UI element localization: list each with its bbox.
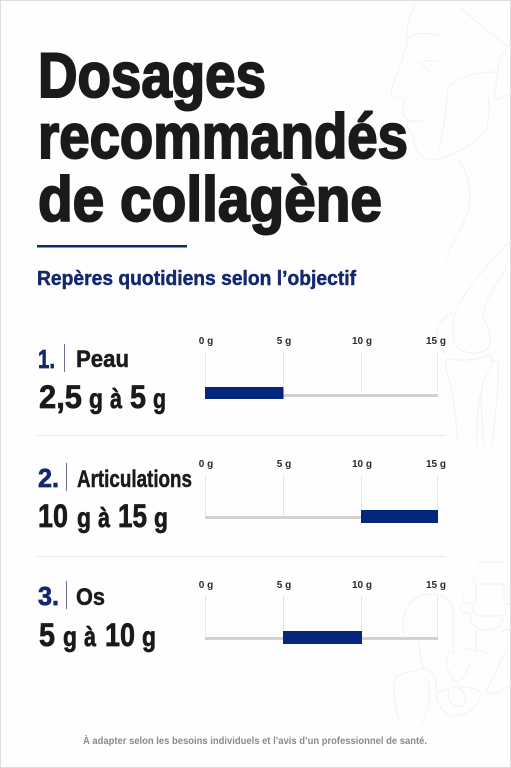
bar chart: os: 15 g (426, 580, 446, 591)
divider (37, 556, 445, 557)
bar chart: peau (199, 336, 446, 399)
panel: articulations (38, 459, 446, 534)
heading: os: Os (76, 584, 105, 611)
panel: os (38, 580, 446, 653)
heading: peau: Peau (76, 346, 129, 373)
dose: 2,5 g à 5 g: 5 (130, 379, 146, 415)
bar chart: os: 5 g (277, 580, 291, 591)
subtitle: Repères quotidiens selon l’objectif (37, 268, 356, 290)
title: de collagène (38, 165, 382, 235)
dose: 5 g à 10 g: g (63, 621, 77, 652)
heading: peau: 1. (38, 344, 55, 374)
bar chart: articulations: 15 g (426, 459, 446, 470)
divider (37, 435, 445, 436)
bar chart: articulations: 0 g (199, 459, 213, 470)
dose: 10 g à 15 g: g (77, 502, 91, 533)
bar chart: peau: 15 g (426, 336, 446, 347)
bar chart: peau: 0 g (199, 336, 213, 347)
title (38, 41, 408, 235)
dose: 2,5 g à 5 g: g (89, 383, 103, 414)
heading: os (38, 581, 105, 611)
bar chart: peau: 5 g (277, 336, 291, 347)
heading: articulations: Articulations (77, 466, 192, 493)
bar chart: os: 0 g (199, 580, 213, 591)
heading: os: 3. (38, 581, 59, 611)
dose: 10 g à 15 g: à (98, 502, 110, 533)
title: recommandés (38, 102, 408, 172)
footnote: À adapter selon les besoins individuels et l’avis d’un professionnel de santé. (83, 734, 427, 747)
bar chart: peau: 10 g (352, 336, 372, 347)
illustration: face profile (391, 0, 511, 262)
heading: peau (38, 344, 129, 374)
bar chart: os: 10 g (352, 580, 372, 591)
dose: 5 g à 10 g: 10 (105, 617, 135, 653)
panel: peau (38, 336, 446, 415)
dose: 10 g à 15 g: 10 (38, 498, 68, 534)
heading: articulations: 2. (38, 463, 59, 493)
bar chart: articulations (199, 459, 446, 523)
dose: 10 g à 15 g: 15 (118, 498, 147, 534)
heading: articulations (38, 463, 192, 493)
dose: 2,5 g à 5 g: g (153, 383, 166, 414)
illustration: hip and spine (394, 562, 511, 726)
dose: 10 g à 15 g: g (154, 502, 168, 533)
dose: 2,5 g à 5 g: à (110, 383, 122, 414)
dose: 5 g à 10 g: 5 (39, 617, 55, 653)
title: Dosages (38, 41, 266, 111)
illustration: knee bones (437, 240, 511, 446)
bar chart: articulations: 10 g (352, 459, 372, 470)
dose: 5 g à 10 g: g (142, 621, 156, 652)
bar chart: os (199, 580, 446, 644)
dose: 5 g à 10 g: à (84, 621, 96, 652)
title underline (37, 245, 187, 248)
bar chart: articulations: 5 g (277, 459, 291, 470)
dose: 2,5 g à 5 g: 2,5 (39, 379, 82, 415)
